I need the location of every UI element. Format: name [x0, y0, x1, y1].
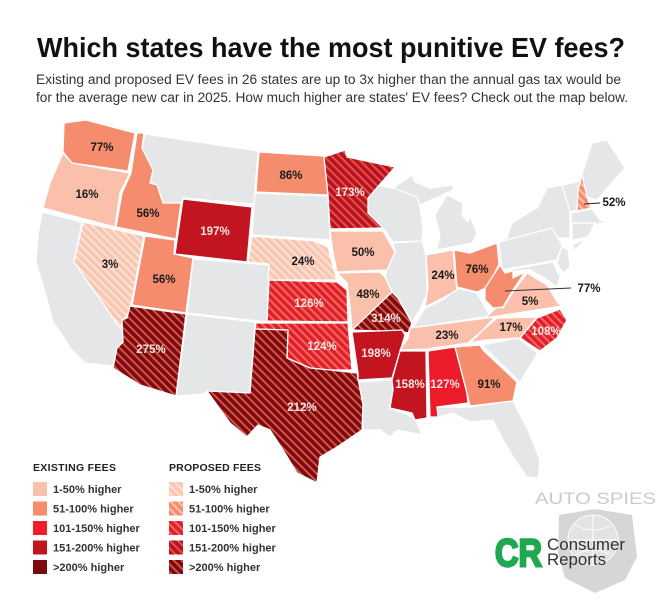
state: Georgia [455, 345, 517, 406]
state: North Dakota [256, 152, 328, 195]
value labels: 56% [152, 274, 176, 286]
callout: West Virginia 77%: 77% [577, 283, 601, 295]
state: Alabama [428, 347, 468, 417]
state: West Virginia [485, 265, 525, 308]
legend: existing fees: 151-200% higher [53, 542, 141, 554]
state: Mississippi [390, 351, 427, 420]
legend: proposed fees: PROPOSED FEES [169, 462, 261, 474]
callout: New Hampshire 52% [584, 197, 626, 209]
state: Utah [132, 236, 193, 313]
state: Arizona [113, 306, 186, 396]
legend: proposed fees: 101-150% higher [189, 523, 277, 535]
value labels: 108% [531, 326, 561, 338]
value labels: 91% [477, 379, 501, 391]
state: Indiana [425, 250, 457, 307]
states with fee data [43, 120, 591, 483]
state: Missouri south [352, 292, 412, 333]
state: New Hampshire [577, 175, 591, 211]
logo: Consumer Reports: Reports [547, 550, 606, 569]
state: Minnesota [324, 150, 395, 229]
state: Iowa [330, 231, 395, 272]
legend: proposed fees: >200% higher [189, 562, 261, 574]
state: Washington [63, 120, 135, 171]
state: Oregon [43, 153, 130, 227]
value labels: 76% [465, 264, 489, 276]
legend: existing fees [33, 462, 141, 574]
legend: existing fees: >200% higher [53, 562, 125, 574]
value labels: 86% [279, 170, 303, 182]
subtitle: Existing and proposed EV fees in 26 states are up to 3x higher than the annual gas tax would be [36, 72, 621, 87]
legend: proposed fees: 51-100% higher [189, 504, 270, 516]
value labels: 24% [291, 256, 315, 268]
value labels: 3% [102, 259, 118, 271]
value labels: 197% [200, 226, 230, 238]
state: Arkansas [352, 330, 405, 380]
state: Tennessee [400, 317, 495, 350]
value labels: 173% [335, 187, 365, 199]
state: Idaho [116, 133, 181, 239]
value labels: 50% [351, 247, 375, 259]
state: Nebraska [248, 236, 337, 280]
subtitle: for the average new car in 2025. How much higher are states' EV fees? Check out the map below. [36, 90, 628, 105]
value labels [75, 142, 561, 414]
value labels: 17% [499, 322, 523, 334]
value labels: 124% [307, 341, 337, 353]
value labels: 48% [356, 289, 380, 301]
logo: Consumer Reports [495, 532, 625, 575]
state: North Carolina east [520, 309, 567, 351]
watermark: auto spies shield [535, 489, 656, 593]
state: Nevada [74, 222, 144, 328]
state: Missouri north [337, 272, 392, 330]
callout: West Virginia 77% [505, 283, 601, 295]
value labels: 198% [361, 348, 391, 360]
value labels: 126% [294, 298, 324, 310]
state: Kansas [267, 280, 348, 322]
value labels: 5% [522, 296, 538, 308]
value labels: 24% [431, 270, 455, 282]
value labels: 212% [287, 402, 317, 414]
legend: existing fees: 101-150% higher [53, 523, 141, 535]
state: Texas [207, 329, 363, 483]
value labels: 275% [136, 344, 166, 356]
legend: existing fees: 51-100% higher [53, 504, 134, 516]
logo: Consumer Reports: Consumer [547, 535, 625, 554]
state: Wyoming [175, 199, 252, 262]
state: Virginia [485, 273, 562, 318]
legend: proposed fees [169, 462, 277, 574]
value labels: 158% [395, 379, 425, 391]
value labels: 314% [371, 313, 401, 325]
logo: Consumer Reports: CR [495, 532, 542, 575]
watermark: auto spies shield: AUTO SPIES [535, 489, 656, 508]
subtitle [36, 72, 628, 105]
state: North Carolina west [470, 317, 537, 343]
legend: proposed fees: 1-50% higher [189, 484, 258, 496]
state: Ohio [454, 243, 499, 292]
callout: New Hampshire 52%: 52% [602, 197, 626, 209]
states without fee data [36, 134, 625, 478]
value labels: 56% [136, 208, 160, 220]
legend: proposed fees: 151-200% higher [189, 542, 277, 554]
legend: existing fees: EXISTING FEES [33, 462, 116, 474]
title: Which states have the most punitive EV fees? [37, 32, 625, 63]
map of the United States [36, 120, 625, 483]
value labels: 23% [435, 330, 459, 342]
value labels: 127% [430, 379, 460, 391]
legend: existing fees: 1-50% higher [53, 484, 122, 496]
value labels: 77% [90, 142, 114, 154]
value labels: 16% [75, 189, 99, 201]
state: Oklahoma [255, 323, 352, 370]
